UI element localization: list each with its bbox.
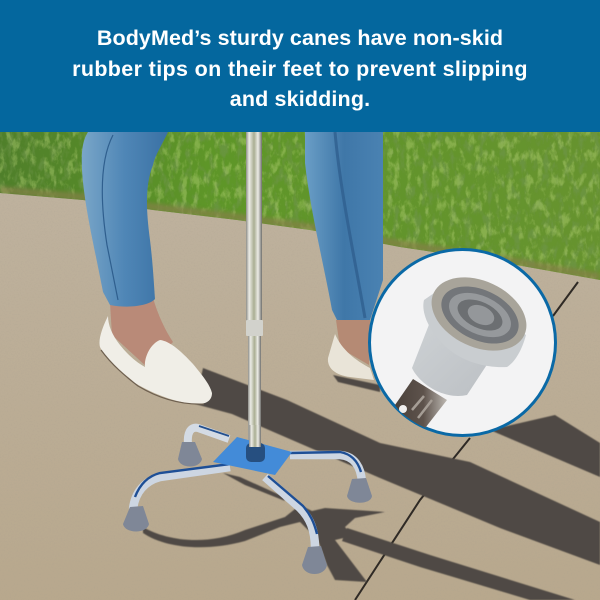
heading text: rubber tips on their feet to prevent slipping bbox=[72, 56, 528, 80]
shoe sole shadow bbox=[101, 350, 204, 404]
banner bbox=[0, 0, 600, 132]
shadows on pavement bbox=[143, 368, 600, 600]
leg front bbox=[265, 477, 315, 548]
shoe bbox=[328, 334, 374, 380]
jeans seam bbox=[335, 132, 365, 318]
hub bbox=[246, 443, 265, 462]
pavement cracks bbox=[355, 282, 578, 600]
left leg bbox=[82, 132, 212, 404]
jeans stitching bbox=[102, 135, 118, 300]
ankle bbox=[110, 298, 173, 368]
foot back left bbox=[178, 442, 202, 466]
sidewalk bbox=[0, 132, 600, 600]
shoe bbox=[99, 316, 212, 404]
chrome tube bbox=[395, 379, 447, 432]
leg right bbox=[290, 455, 362, 482]
magnified circle inset bbox=[370, 250, 556, 436]
heading text bbox=[72, 26, 528, 111]
leg back left bbox=[188, 428, 229, 444]
cane base bbox=[123, 425, 372, 574]
foot right bbox=[347, 478, 372, 503]
photo: cane on sidewalk bbox=[0, 132, 600, 600]
leg left bbox=[133, 467, 230, 509]
heading text: BodyMed’s sturdy canes have non-skid bbox=[97, 26, 503, 50]
jeans bbox=[305, 132, 383, 320]
plate bbox=[213, 437, 292, 475]
right leg bbox=[305, 132, 383, 380]
ankle bbox=[336, 320, 370, 365]
rubber tip bbox=[412, 263, 538, 396]
jeans bbox=[82, 132, 168, 307]
foot front bbox=[302, 546, 327, 574]
heading text: and skidding. bbox=[230, 87, 370, 111]
circle background bbox=[370, 250, 556, 436]
cane shaft bbox=[246, 132, 263, 444]
grass bbox=[0, 132, 600, 282]
foot left bbox=[123, 506, 149, 532]
